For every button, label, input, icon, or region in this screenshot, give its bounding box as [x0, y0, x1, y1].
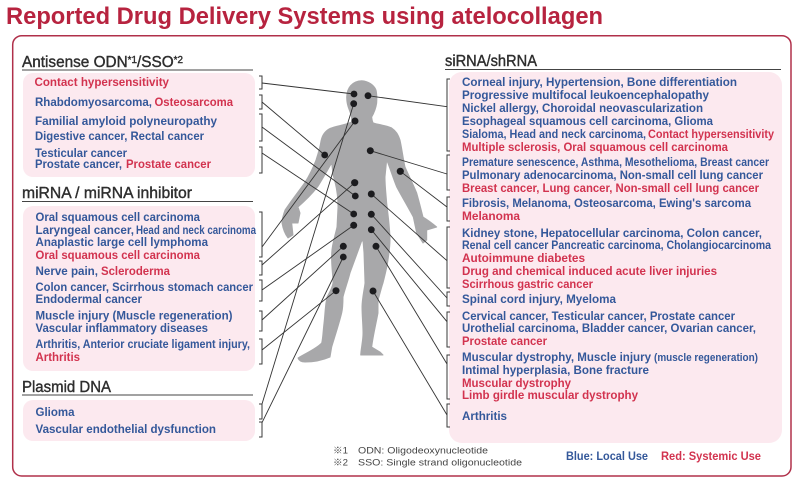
siRNA entries: Scirrhous gastric cancer [462, 277, 593, 291]
heading: Antisense ODN/SSO: *1 [128, 55, 137, 66]
miRNA entries: Head and neck carcinoma [136, 225, 256, 237]
miRNA entries: Colon cancer, Scirrhous stomach cancer [36, 280, 253, 294]
plasmid entries [36, 405, 216, 436]
heading: Antisense ODN/SSO: Antisense ODN [22, 54, 129, 71]
left connector brackets [259, 76, 262, 437]
connector lines from brackets to body sites [262, 83, 447, 423]
miRNA entries: Oral squamous cell carcinoma [36, 210, 200, 224]
body site markers [321, 91, 404, 294]
miRNA entries: Arthritis, Anterior cruciate ligament injury, [36, 337, 250, 351]
miRNA entries: Vascular inflammatory diseases [36, 321, 208, 335]
siRNA entries: Autoimmune diabetes [462, 251, 585, 265]
siRNA entries: Corneal injury, Hypertension, Bone differentiation [462, 75, 737, 89]
siRNA entries: Prostate cancer [462, 334, 547, 348]
siRNA entries: Drug and chemical induced acute liver injuries [462, 264, 717, 278]
siRNA entries: (muscle regeneration) [654, 352, 758, 364]
footnotes: ※1 [333, 446, 348, 456]
legend: Red: Systemic Use [661, 449, 761, 463]
antisense entries: Familial amyloid polyneuropathy [35, 114, 217, 128]
plasmid entries: Glioma [36, 405, 75, 419]
siRNA entries: Muscular dystrophy, Muscle injury [462, 350, 651, 364]
miRNA entries: Nerve pain, [36, 264, 98, 278]
miRNA list box [23, 206, 255, 371]
antisense entries: Contact hypersensitivity [34, 75, 169, 89]
footnotes: SSO: Single strand oligonucleotide [358, 458, 522, 468]
siRNA entries: Nickel allergy, Choroidal neovascularization [462, 101, 703, 115]
miRNA entries: Scleroderma [101, 264, 170, 278]
siRNA entries: Spinal cord injury, Myeloma [462, 292, 616, 306]
siRNA entries: Limb girdle muscular dystrophy [462, 388, 638, 402]
siRNA entries: Urothelial carcinoma, Bladder cancer, Ovarian cancer, [462, 321, 756, 335]
plasmid list box [23, 400, 255, 441]
siRNA entries: Progressive multifocal leukoencephalopathy [462, 88, 709, 102]
antisense list box [23, 73, 255, 177]
antisense entries: Digestive cancer, Rectal cancer [35, 129, 204, 143]
siRNA entries: Pulmonary adenocarcinoma, Non-small cell lung cancer [462, 168, 763, 182]
title: Reported Drug Delivery Systems using atelocollagen [6, 3, 603, 30]
siRNA entries: Kidney stone, Hepatocellular carcinoma, Colon cancer, [462, 226, 762, 240]
legend: Blue: Local Use [566, 449, 648, 463]
miRNA entries: Oral squamous cell carcinoma [36, 248, 200, 262]
siRNA entries: Contact hypersensitivity [648, 127, 774, 141]
antisense entries: Rhabdomyosarcoma, [35, 95, 152, 109]
siRNA entries: Cervical cancer, Testicular cancer, Prostate cancer [462, 309, 735, 323]
siRNA entries: Melanoma [462, 209, 520, 223]
panel: miRNA / miRNA inhibitor [22, 185, 256, 371]
siRNA entries: Breast cancer, Lung cancer, Non-small cell lung cancer [462, 181, 759, 195]
panel: siRNA/shRNA [445, 53, 782, 443]
footnotes [333, 446, 522, 468]
siRNA entries: Intimal hyperplasia, Bone fracture [462, 363, 649, 377]
miRNA entries [36, 210, 256, 364]
miRNA entries: Muscle injury (Muscle regeneration) [36, 308, 232, 322]
plasmid entries: Vascular endothelial dysfunction [36, 422, 216, 436]
siRNA entries: Arthritis [462, 409, 507, 423]
heading: Antisense ODN/SSO: *2 [174, 55, 183, 66]
heading: Plasmid DNA: Plasmid DNA [22, 379, 112, 396]
human body silhouette [282, 81, 437, 362]
antisense entries: Prostate cancer, [35, 157, 122, 171]
miRNA entries: Arthritis [36, 350, 80, 364]
siRNA entries: Esophageal squamous cell carcinoma, Glioma [462, 114, 713, 128]
miRNA entries: Endodermal cancer [36, 292, 142, 306]
panel: Antisense ODN/SSO [22, 54, 255, 177]
panel: Plasmid DNA [22, 379, 255, 441]
heading: miRNA / miRNA inhibitor: miRNA / miRNA inhibitor [22, 185, 192, 202]
heading: Antisense ODN/SSO: /SSO [137, 54, 174, 71]
siRNA entries [462, 75, 774, 423]
right connector brackets [447, 79, 450, 427]
antisense entries: Prostate cancer [126, 157, 211, 171]
antisense entries: Testicular cancer [35, 146, 127, 160]
footnotes: ODN: Oligodeoxynucleotide [358, 446, 488, 456]
miRNA entries: Laryngeal cancer, [36, 223, 134, 237]
siRNA entries: Muscular dystrophy [462, 376, 571, 390]
miRNA entries: Anaplastic large cell lymphoma [36, 235, 208, 249]
siRNA entries: Sialoma, Head and neck carcinoma, [462, 127, 646, 141]
siRNA entries: Multiple sclerosis, Oral squamous cell carcinoma [462, 140, 728, 154]
antisense entries: Osteosarcoma [154, 95, 233, 109]
legend [566, 449, 761, 463]
footnotes: ※2 [333, 458, 348, 468]
siRNA list box [449, 72, 782, 443]
heading: siRNA/shRNA: siRNA/shRNA [445, 53, 538, 70]
antisense entries [34, 75, 233, 171]
siRNA entries: Fibrosis, Melanoma, Osteosarcoma, Ewing's sarcoma [462, 196, 751, 210]
